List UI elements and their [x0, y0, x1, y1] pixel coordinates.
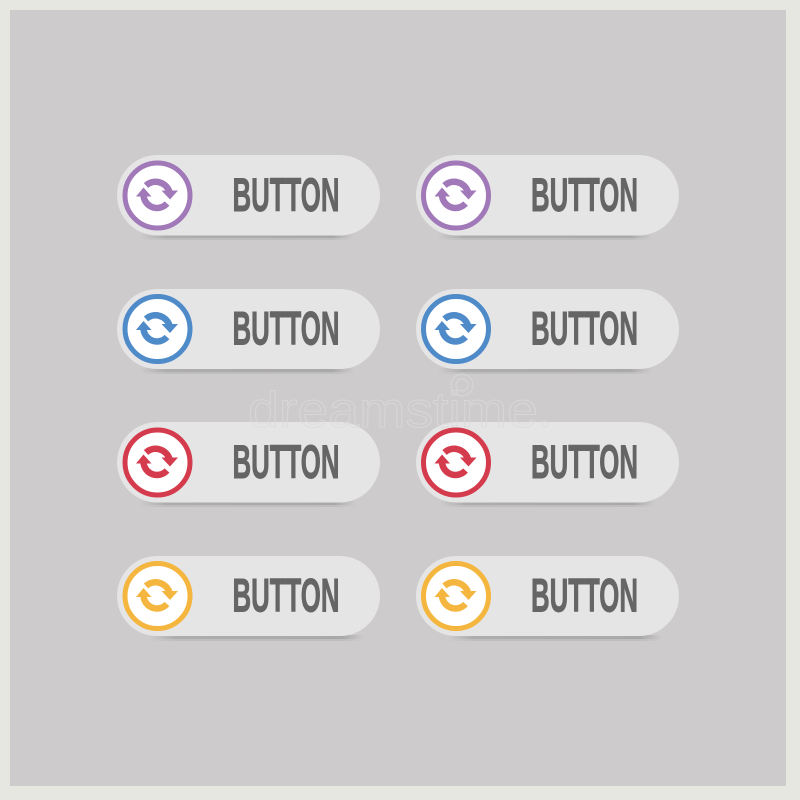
icon: yellow refresh [125, 564, 190, 628]
icon: yellow refresh [424, 564, 488, 628]
button: yellow left [117, 556, 380, 641]
label: BUTTON [232, 435, 340, 488]
button: blue right [416, 289, 679, 374]
label: BUTTON [531, 168, 638, 221]
icon: purple refresh [125, 163, 190, 228]
button: blue left [117, 289, 380, 374]
label: BUTTON [531, 302, 638, 354]
button: yellow right [416, 556, 679, 641]
icon: red refresh [125, 430, 190, 495]
icon: red refresh [424, 430, 488, 495]
label: BUTTON [232, 168, 340, 221]
icon: blue refresh [125, 296, 190, 362]
icon: blue refresh [424, 296, 488, 362]
button: purple left [117, 155, 380, 240]
label: BUTTON [531, 435, 638, 488]
button: purple right [416, 155, 679, 240]
label: BUTTON [232, 302, 340, 354]
button: red left [117, 422, 380, 507]
label: BUTTON [232, 568, 340, 622]
watermark: dreamstime [248, 382, 538, 438]
label: BUTTON [531, 568, 638, 622]
button: red right [416, 422, 679, 507]
icon: purple refresh [424, 163, 488, 228]
